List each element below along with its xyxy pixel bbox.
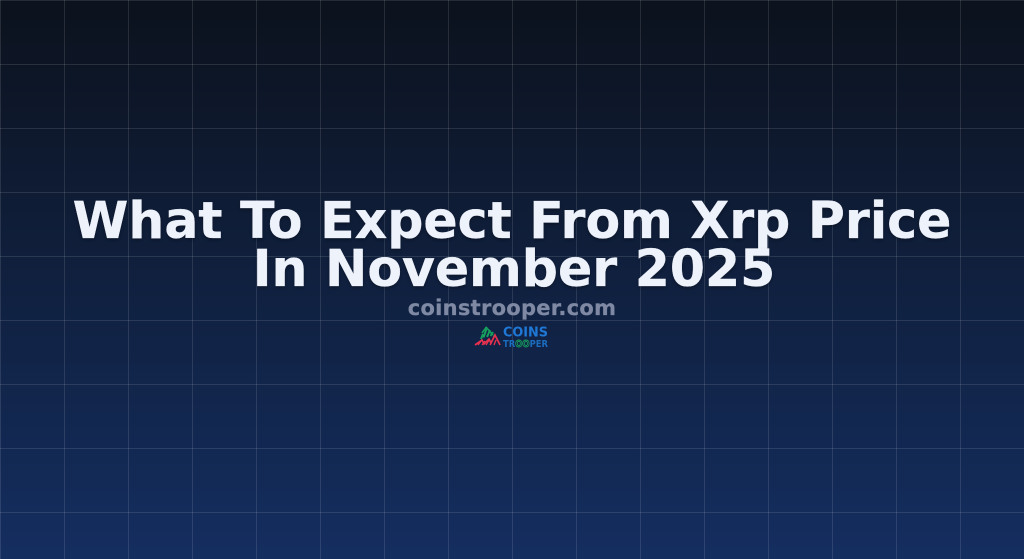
- logo: Coins Trooper: [474, 324, 548, 350]
- logo wordmark: COINS: COINS: [503, 324, 548, 340]
- logo wordmark: TROOPER: TROOPER: [503, 339, 548, 350]
- website name: coinstrooper.com: [408, 296, 616, 320]
- title: What To Expect From Xrp Price: [73, 191, 951, 250]
- icon: green and red chart arrows: [475, 327, 500, 345]
- title: [73, 191, 951, 298]
- title: In November 2025: [253, 239, 775, 298]
